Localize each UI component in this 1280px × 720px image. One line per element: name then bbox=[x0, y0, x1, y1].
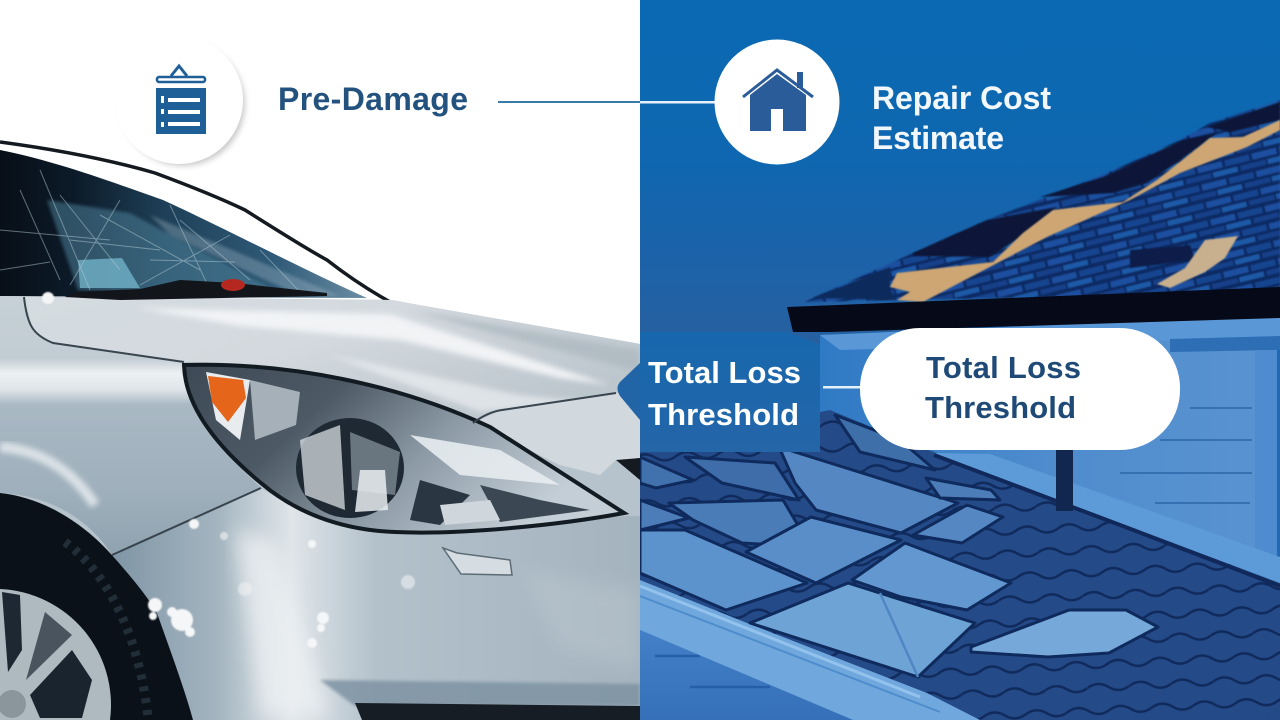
below gutter wall bbox=[640, 630, 853, 720]
gutter bbox=[640, 580, 980, 720]
wiper red accent bbox=[221, 279, 245, 291]
pill text: Total Loss bbox=[926, 350, 1081, 385]
callout: white total loss threshold pill bbox=[860, 328, 1180, 450]
hood highlights bbox=[139, 308, 610, 412]
trim outer shade bbox=[1277, 350, 1280, 565]
icon: house bbox=[743, 70, 813, 131]
badge: pre-damage bbox=[115, 36, 245, 166]
lower roof bbox=[640, 410, 1280, 720]
tyre tread bbox=[65, 542, 148, 718]
label: repair cost estimate: Repair Cost bbox=[872, 80, 1051, 116]
wheel rim bbox=[0, 589, 111, 720]
fender arc highlight bbox=[0, 447, 95, 505]
house wall bbox=[820, 315, 1280, 590]
panel: damaged roof bbox=[640, 100, 1280, 720]
wall fascia strip bbox=[934, 453, 1280, 583]
wall eave shadow bbox=[1170, 336, 1280, 352]
panel shut lines bbox=[24, 297, 616, 555]
dark grille notch bbox=[616, 458, 640, 480]
panel: left background bbox=[0, 0, 640, 720]
broken shingles bbox=[640, 415, 1158, 677]
wiper bbox=[65, 280, 327, 300]
pill text: Threshold bbox=[925, 390, 1076, 425]
bumper bright streak bbox=[235, 530, 330, 716]
bumper bbox=[112, 488, 640, 720]
callout arrow bbox=[618, 363, 640, 420]
gutter crease bbox=[640, 596, 940, 712]
hail marks bbox=[42, 292, 415, 648]
icon: clipboard list bbox=[156, 66, 206, 134]
bumper upper shade bbox=[545, 587, 633, 658]
gutter highlight bbox=[640, 586, 920, 697]
panel: right sky bbox=[640, 0, 1280, 720]
label: pre-damage: Pre-Damage bbox=[278, 81, 468, 117]
hood bbox=[24, 297, 640, 423]
exposed decking patch bbox=[1157, 236, 1238, 288]
connector line: right part bbox=[640, 101, 718, 104]
car body base bbox=[0, 296, 640, 720]
wheel arch and tyre bbox=[0, 493, 193, 720]
below gutter siding bbox=[655, 656, 770, 687]
hood right panel bbox=[473, 392, 640, 475]
wall top band bbox=[820, 322, 1148, 350]
exposed roof decking bbox=[890, 120, 1280, 302]
callout: blue total loss threshold bbox=[618, 332, 820, 452]
post bbox=[1056, 445, 1073, 511]
label: repair cost estimate: Estimate bbox=[872, 120, 1004, 156]
connector: callout to pill bbox=[823, 386, 863, 388]
callout text: Total Loss bbox=[648, 355, 801, 390]
roof slope bbox=[805, 100, 1280, 302]
shingle crease bbox=[880, 593, 918, 677]
bumper lower shadow bbox=[320, 680, 640, 706]
connector line: left part bbox=[498, 101, 640, 103]
front fender bbox=[0, 296, 261, 555]
fascia shadow bbox=[934, 455, 1280, 586]
windshield bbox=[0, 142, 392, 303]
roof fascia bbox=[787, 287, 1280, 332]
badge: repair cost bbox=[714, 40, 840, 164]
hood shadow band bbox=[430, 314, 640, 369]
panel: damaged car bbox=[0, 142, 640, 720]
headlight bbox=[184, 365, 624, 533]
dark roof patches bbox=[813, 102, 1280, 300]
indicator lamp bbox=[208, 376, 246, 422]
callout text: Threshold bbox=[648, 397, 799, 432]
reflector slot bbox=[443, 548, 512, 575]
wall siding bbox=[1120, 408, 1252, 503]
lower grille bbox=[355, 703, 640, 720]
corner trim bbox=[1255, 350, 1277, 562]
